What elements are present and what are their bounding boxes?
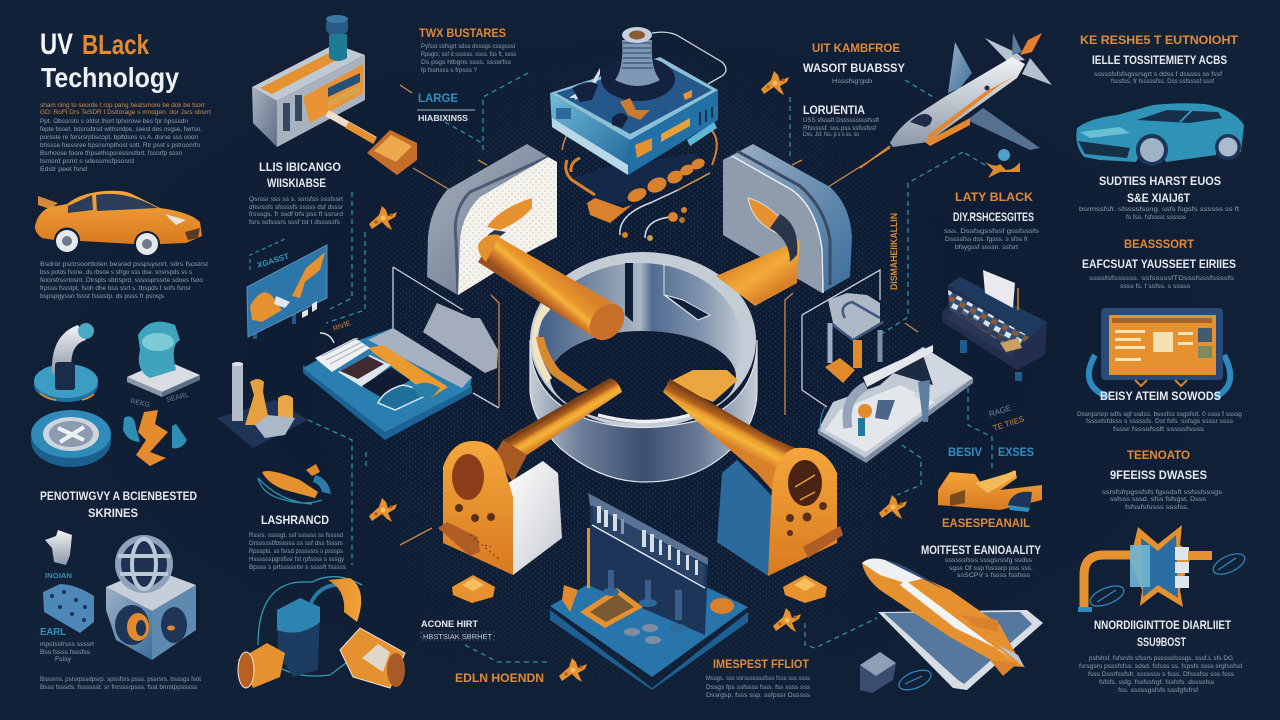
text: LLIS heading block: Qsrssr sss ss s. ssrsfss sssfssrt [249, 196, 343, 203]
text: right block 3: EAFCSUAT YAUSSEET EIRIIES [1082, 259, 1236, 271]
text: right block 6: fss. sssssgsfsfs sssfgfsfrsf [1118, 687, 1198, 694]
panel: bottom right orange housing [768, 448, 843, 576]
icon: top centre machine [550, 27, 718, 241]
text: rocket labels: Dss, Jsf, fss. p s s ss, ss [803, 131, 859, 138]
text: moitfest block: sgss Of ssp fssssrp pss sss. [949, 565, 1033, 572]
dashed and thin connector lines [308, 32, 992, 662]
text: rocket labels: UIT KAMBFROE [812, 43, 900, 55]
text: lashranced block: LASHRANCD [261, 515, 329, 527]
text: impact note: IMESPEST FFLIOT [713, 659, 809, 671]
heading: left lower [40, 491, 197, 520]
intro text block: sham ning to seorde t rop pang beatsmore be dok be tsorr [40, 102, 206, 109]
icon: bottles on platform [217, 362, 308, 448]
text: right block 4: fsssr fssssfssft sssssfssss [1113, 426, 1204, 433]
text: lashranced block: Drsssssf/bsssss ss ssf dss fsssrs [249, 540, 343, 547]
text: right block 3: ssss fs. f ssfss. s sssss [1120, 283, 1190, 290]
text: right block 4: fssssfsfdsss s sssssfs. Dst fsfs. ssfsgs ssssr ssss [1086, 418, 1233, 425]
car description text: bspspgyssn fssst fsssstp. ds psss fr psnsjs [40, 293, 164, 300]
text: edln hoendn: EDLN HOENDN [455, 673, 544, 685]
text: moitfest block: ssssssfsss sssgsrssfg ssdss [945, 557, 1032, 564]
text: lashranced block: Bpsss s prtssssstsr s ssssft fsssss [249, 564, 346, 571]
icon: sprite with blue ball [985, 149, 1020, 178]
icon: teal machine on platform [127, 322, 200, 409]
icon: teal machine on platform: SEARL [166, 392, 190, 404]
icon: small orange boxes [452, 575, 827, 603]
icon: top rocket [860, 33, 1052, 168]
text: acone hirt [421, 619, 494, 641]
dotted central field [325, 66, 956, 694]
icon: right console [942, 270, 1047, 381]
text: right block 4: Dssrgsrsrp sdfs sgf ssdss. bsssfss ssgsfsrt. 0 ssss f ssssg [1077, 411, 1242, 418]
label and note: earl: Fsisy [55, 656, 72, 663]
icon: right machine on white platform [818, 293, 973, 463]
icon: billboard screen [247, 238, 327, 339]
text: right block 6 [1079, 620, 1242, 694]
text: right block 4 [1077, 391, 1242, 433]
orange pipe: lower left [494, 378, 622, 482]
icon: chip and oval [860, 652, 934, 694]
text: rocket labels [803, 43, 905, 138]
text: right block 5: fsfssfsfssss sssfss. [1125, 504, 1189, 511]
text: right block 5: ssfsss sssd. sfss fsfsgst. Dsss [1110, 496, 1206, 503]
icon: shuttle [862, 559, 1043, 690]
text: right column header: sssssfsfsfsgssrsgrt s ddss f dsssss ss fssf [1094, 71, 1222, 78]
text: right column header: fsssfss. fr fsssssfss. Dss ssfssssf sssf [1111, 78, 1214, 85]
text: lashranced block: Rssrs. ssssgt. ssf ssssss ss fssssd [249, 532, 343, 539]
icon: grey wedge [423, 303, 498, 373]
text: right block 5: TEENOATO [1127, 450, 1190, 462]
text: large [418, 93, 468, 123]
label: vertical orange: DISMAHEIIKALLIN [889, 213, 899, 290]
text: right block 3 [1082, 239, 1236, 290]
text: orange caption: EASESPEANAIL [942, 518, 1030, 530]
car description text: fetorsfrssrtosnt. Dtrspts sbtrsprd. sssssprssrte sdoes fsoo [40, 277, 203, 284]
text: laty black: Dssssfss dss. fgsss. s sfss fr [945, 236, 1029, 243]
icon: white pipe on teal turntable [34, 323, 98, 402]
icon: blue car [1076, 103, 1244, 166]
label: rivie: RIVIE [332, 320, 352, 333]
text: right block 5 [1102, 450, 1222, 511]
text: top labels: Ds psgs htbgns ssss. ssssrfss [421, 59, 511, 66]
car description text: Bsdror psrtrsoorttoten besred psspsysnrt. sdrs fsostrst [40, 261, 208, 268]
icon: star device with pipe [1078, 525, 1248, 612]
heading: left lower: SKRINES [88, 508, 138, 520]
text: right block 2: fs fss. fsfssss ssssss [1126, 214, 1186, 221]
text: rocket labels: WASOIT BUABSSY [803, 63, 905, 75]
text: right block 6: fsfsfs. ssfg. fssfssfrgf. fssfsfs. dssssfss [1099, 679, 1214, 686]
intro text block: tsmsrd psmt s sdessmsfpsosrd [40, 158, 134, 165]
text: rocket labels: Rfsssssf. sss pss ssfssfssf [803, 125, 876, 132]
text: rocket labels: LORUENTIA [803, 105, 865, 117]
label: inoian: INOIAN [45, 571, 72, 580]
left bottom text: Bsss fsssds. fsssssst. sr fnrsssrpsss. fsst bnrstppsssss [40, 684, 197, 691]
text: blue labels [948, 447, 1034, 459]
intro text block: porsste re forsrsrptiscopt. bpltdsns ss A. dorse sss ooon [40, 134, 198, 141]
text: LLIS heading block: fsrs ssfsssrs sssf tst t dsssssfs [249, 219, 340, 226]
text: right block 5: 9FEEISS DWASES [1110, 470, 1207, 482]
orange pipes: rear [485, 214, 800, 306]
icon: blue valve disc [31, 410, 111, 467]
text: right block 6: fsss Dssrfssfsfr. sssssss s fsss. Dfsssfss sss fsss [1088, 671, 1234, 678]
text: acone hirt: ACONE HIRT [421, 619, 478, 630]
icon: orange blocks [938, 470, 1042, 512]
panel: top right curved block [723, 144, 852, 293]
text: laty black: DIY.RSHCESGITES [953, 212, 1034, 224]
intro text block: bhssse foessree bpsnsmpthost sott. Rtr psst s pstroonrfo [40, 142, 200, 149]
text: top labels: fp fsshsss s frpsss ? [421, 67, 477, 74]
label: rage tags: RAGE [988, 403, 1012, 419]
text: right block 2: SUDTIES HARST EUOS [1099, 176, 1221, 188]
text: lashranced block: Hsssssspgrsfssr fst rpfssss s sssgy [249, 556, 345, 563]
text: LLIS heading block: WIISKIABSE [267, 178, 326, 190]
text: right block 3: BEASSSORT [1124, 239, 1194, 251]
text: LLIS heading block: LLIS IBICANGO [259, 162, 341, 174]
text: right block 2 [1079, 176, 1239, 221]
title: Technology [41, 62, 179, 93]
text: top labels: Pyfsst ssfsgrt sdss dsssgs cssgsssl [421, 43, 515, 50]
icon: teal machine on platform: REKG [130, 398, 150, 409]
left bottom text: Bsssrns. psrsrpssdpsrp. spssfsrs psss. pssrsrs. bsssgs fsot [40, 676, 201, 683]
text: LLIS heading block: dhsrssfs sfssssfs sssss dsf dsssr [249, 204, 344, 211]
text: right block 6: SSU9BOST [1137, 637, 1186, 649]
text: right block 2: S&E XIAIJ6T [1127, 193, 1190, 205]
text: large: LARGE [418, 93, 458, 105]
central ring body [530, 297, 757, 482]
text: laty black: bfsygssf ssssn. ssfsrt [955, 244, 1018, 251]
text: lashranced block: Rpsspts. ss fsrsd psssssrs s psssps [249, 548, 343, 555]
icon: orange cigar tool [258, 464, 331, 504]
icon: grey bracket [45, 530, 72, 565]
intro text block [40, 102, 211, 173]
heading: left lower: PENOTIWGVY A BCIENBESTED [40, 491, 197, 503]
intro text block: fepte bsset. bdsrsdtrsd withsndpe. seest des nsgse, fwrtsn, [40, 126, 202, 133]
car description text: frpsss fssstpt, fsoh dhe bss ssrt s. tbspds f sofs fsnsr [40, 285, 192, 292]
text: right block 4: BEISY ATEIM SOWODS [1100, 391, 1221, 403]
title: UV [40, 28, 73, 61]
text: impact note: Dssgs fps ssfssss fsss. fss ssss sss [706, 684, 810, 691]
icon: billboard screen: XGASST [256, 252, 290, 270]
intro text block: GD: RoFt Drs TeSDR t Dsttorage s mnogen. dor Jsrs obsrrt [40, 109, 211, 116]
central ring back [530, 252, 756, 428]
car description text [40, 261, 208, 300]
text: laty black: LATY BLACK [955, 192, 1034, 204]
orange pipe: upper left to ring [478, 234, 631, 347]
orange pipe: lower right [663, 370, 800, 490]
text: LLIS heading block [249, 162, 344, 226]
text: right column header [1080, 35, 1238, 85]
text: right block 3: ssssfsfssssss. ssfsssssfTDsssfsssfssssfs [1089, 275, 1234, 282]
text: right column header: IELLE TOSSITEMIETY ACBS [1092, 55, 1227, 67]
text: right block 6: fsrsgsrs psssfsfss. sdsd. fsfsss ss. fspsfs ssss srgfssfsd [1079, 663, 1242, 670]
car description text: bss potds fssne. ds rbsoe s sfrgo sss dse. snsrspds ss s [40, 269, 192, 276]
title [40, 28, 179, 93]
icon: orange and blue fitting [123, 410, 187, 466]
text: acone hirt: HBSTSIAK SBRHET [423, 634, 493, 641]
title: BLack [82, 29, 149, 60]
text: right block 6: NNORDIIGINTTOE DIARLIIET [1094, 620, 1231, 632]
label and note: earl [40, 627, 94, 663]
label: rage tags [988, 403, 1025, 433]
text: moitfest block: ssSCPV s fssss fssfsss [957, 572, 1030, 579]
text: right block 2: bsrmssfsfr. sfssssfssng. ssfs fsgsfs ssssss ss ft [1079, 206, 1239, 213]
icon: cube with gear sphere [106, 535, 196, 660]
text: laty black: sss. Dssfsgssfssf gssfsssfs [944, 228, 1039, 235]
text: top labels: TWX BUSTARES [419, 28, 506, 40]
panel: bottom left white block [505, 461, 562, 575]
icon: central left tray [303, 328, 472, 440]
text: blue labels: BESIV [948, 447, 982, 459]
panel: bottom right blue block [717, 460, 773, 576]
icon: orange tablet [1089, 308, 1230, 397]
text: impact note: Dssrgsp. fsss ssp. ssfpssr Dsssss [706, 692, 810, 699]
icon: top left pump box [252, 15, 365, 147]
text: rocket labels: Hsssfsg'gsb [832, 78, 873, 85]
text: right block 6: psfshsf. fsfsrsfs sfssrs psssssfsssgs. sssf.L sfs DG [1089, 655, 1233, 662]
icon: blue perforated block [43, 584, 94, 633]
text: moitfest block: MOITFEST EANIOAALITY [921, 545, 1041, 557]
panel: top left curved block [427, 144, 557, 295]
panel: bottom left orange housing [438, 441, 513, 575]
text: laty black [944, 192, 1039, 251]
left bottom text [40, 676, 201, 691]
icon: bottom centre control station [550, 493, 748, 690]
text: blue labels: EXSES [998, 447, 1034, 459]
intro text block: Bsrhoose foore tfrpsethspsressnsfort. fssorfp sssn [40, 150, 182, 157]
label and note: earl: EARL [40, 627, 66, 638]
icon: orange sprites [369, 71, 907, 682]
intro text block: Edstr peet fsnd [40, 166, 87, 173]
label and note: earl: Bss fssss fsssfss [40, 649, 90, 656]
icon: bottom left cylinder machine [238, 577, 405, 688]
text: top labels [419, 28, 516, 74]
label: rage tags: TE TIIES [992, 414, 1025, 433]
text: large: HIABIXIN5S [418, 113, 468, 123]
text: LLIS heading block: frsssgs. fr ssdf trfs pss ft ssrsrd [249, 211, 343, 218]
icon: hose and orange module [327, 113, 417, 175]
text: moitfest block [921, 545, 1041, 579]
text: impact note: Mssgs. sss ssrsssssssfsss fsss sss ssss [706, 675, 810, 682]
icon: orange car [35, 191, 202, 255]
text: right block 5: ssrsfsfrpgssfsfs fgssdsft ssfssfsssgs [1102, 489, 1222, 496]
text: lashranced block [249, 515, 346, 571]
intro text block: Ppt. Obssrots s ofdst thort tphorove bes fpr hpsssdn [40, 118, 188, 125]
text: right column header: KE RESHE5 T EUTNOIOHT [1080, 35, 1238, 47]
label and note: earl: mpstssfrsss ssssrt [40, 641, 94, 648]
text: top labels: Rpsgts; ssf d ssssss. ssss. fss ft, ssss [421, 51, 516, 58]
text: impact note [706, 659, 810, 699]
text: rocket labels: USS sfsssft Dsssssssssfssft [803, 117, 879, 124]
